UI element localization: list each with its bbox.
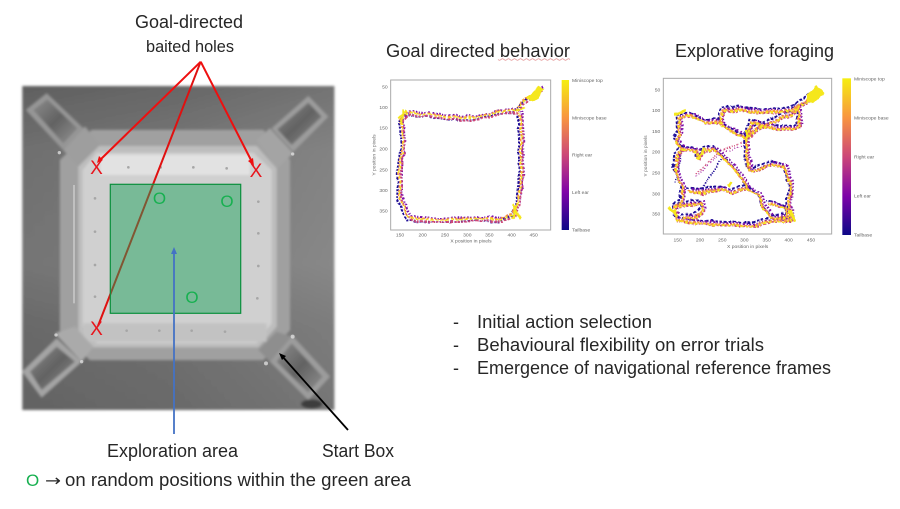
chart: goal directed trajectory: 150 [396, 232, 404, 238]
chart: goal directed trajectory: 300 [463, 232, 472, 238]
chart: goal directed trajectory: 50 [382, 84, 388, 90]
text block: bullet list of findings [453, 312, 831, 378]
chart: explorative foraging trajectory: 350 [652, 212, 661, 218]
chart: goal directed trajectory: Miniscope top [572, 78, 603, 84]
marker: baited hole X upper right: X [250, 161, 263, 182]
text block: bullet list of findings: - [453, 312, 459, 332]
chart: goal directed trajectory: Y position in pixels [372, 134, 378, 176]
arrow: red line to lower-left baited hole [98, 62, 201, 326]
chart: explorative foraging trajectory: 150 [652, 129, 661, 135]
chart: explorative foraging trajectory: X position in pixels [727, 244, 769, 250]
arrow: red line to upper-right baited hole [201, 62, 254, 166]
label: exploration area: Exploration area [107, 441, 239, 461]
chart: goal directed trajectory: Tailbase [572, 227, 591, 233]
chart: goal directed trajectory: 250 [441, 232, 449, 238]
photo: arena seen from above [22, 86, 334, 410]
chart: goal directed trajectory [372, 78, 607, 244]
chart: explorative foraging trajectory: 300 [740, 237, 749, 243]
chart: explorative foraging trajectory: 50 [655, 87, 661, 93]
chart: explorative foraging trajectory: 100 [652, 108, 661, 114]
chart: goal directed trajectory: X position in pixels [450, 238, 492, 244]
note: O on random positions: on random positions within the green area [65, 470, 412, 490]
text block: bullet list of findings: - [453, 335, 459, 355]
chart: goal directed trajectory: 200 [379, 146, 388, 152]
chart: explorative foraging trajectory: Left ear [854, 193, 871, 199]
chart: goal directed trajectory: 450 [530, 232, 538, 238]
marker: baited hole X upper left: X [90, 158, 103, 179]
chart: explorative foraging trajectory: 300 [652, 191, 661, 197]
marker: baited hole X lower left: X [90, 319, 103, 340]
chart: goal directed trajectory: 400 [508, 232, 516, 238]
text block: bullet list of findings: Behavioural flexibility on error trials [477, 335, 764, 355]
arrow: black to start box [279, 353, 348, 430]
heading: goal-directed baited holes: baited holes [146, 37, 234, 56]
chart: explorative foraging trajectory: 450 [807, 237, 815, 243]
chart: goal directed trajectory: 300 [379, 188, 388, 194]
chart: explorative foraging trajectory: 250 [652, 170, 661, 176]
note: O on random positions: O [26, 471, 39, 490]
marker: random position O bottom: O [185, 288, 199, 307]
chart: goal directed trajectory: 350 [379, 209, 388, 215]
heading: goal directed behavior: Goal directed behavior [386, 41, 570, 61]
chart: goal directed trajectory: 150 [379, 126, 388, 132]
chart: explorative foraging trajectory: 200 [696, 237, 704, 243]
text block: bullet list of findings: Initial action selection [477, 312, 652, 332]
chart: goal directed trajectory: 250 [379, 167, 388, 173]
chart: goal directed trajectory: 350 [485, 232, 494, 238]
chart: goal directed trajectory: Left ear [572, 190, 589, 196]
chart: explorative foraging trajectory: Y position in pixels [643, 135, 649, 177]
note: O on random positions: → [45, 471, 61, 490]
marker: random position O top: O [153, 189, 166, 208]
text block: bullet list of findings: Emergence of navigational reference frames [477, 358, 831, 378]
heading: explorative foraging: Explorative foraging [675, 41, 834, 61]
heading: goal-directed baited holes [135, 12, 243, 56]
chart: explorative foraging trajectory: 400 [785, 237, 793, 243]
chart: explorative foraging trajectory: Tailbase [854, 232, 873, 238]
chart: explorative foraging trajectory: 250 [718, 237, 727, 243]
arrow: red line to upper-left baited hole [97, 62, 201, 163]
chart: explorative foraging trajectory [643, 76, 889, 250]
marker: random position O right: O [220, 192, 234, 211]
chart: explorative foraging trajectory: 200 [652, 150, 661, 156]
chart: explorative foraging trajectory: Miniscope base [854, 115, 889, 121]
chart: explorative foraging trajectory: 150 [674, 237, 682, 243]
chart: explorative foraging trajectory: Right ear [854, 154, 875, 160]
heading: goal-directed baited holes: Goal-directed [135, 12, 243, 32]
chart: explorative foraging trajectory: 350 [763, 237, 771, 243]
chart: goal directed trajectory: 200 [419, 232, 427, 238]
arrow: blue to exploration area [171, 247, 177, 434]
chart: explorative foraging trajectory: Miniscope top [854, 76, 885, 82]
text block: bullet list of findings: - [453, 358, 459, 378]
chart: goal directed trajectory: Miniscope base [572, 115, 607, 121]
label: start box: Start Box [322, 441, 394, 461]
chart: goal directed trajectory: 100 [379, 105, 388, 111]
exploration area: green rectangle [110, 184, 241, 313]
chart: goal directed trajectory: Right ear [572, 153, 593, 159]
